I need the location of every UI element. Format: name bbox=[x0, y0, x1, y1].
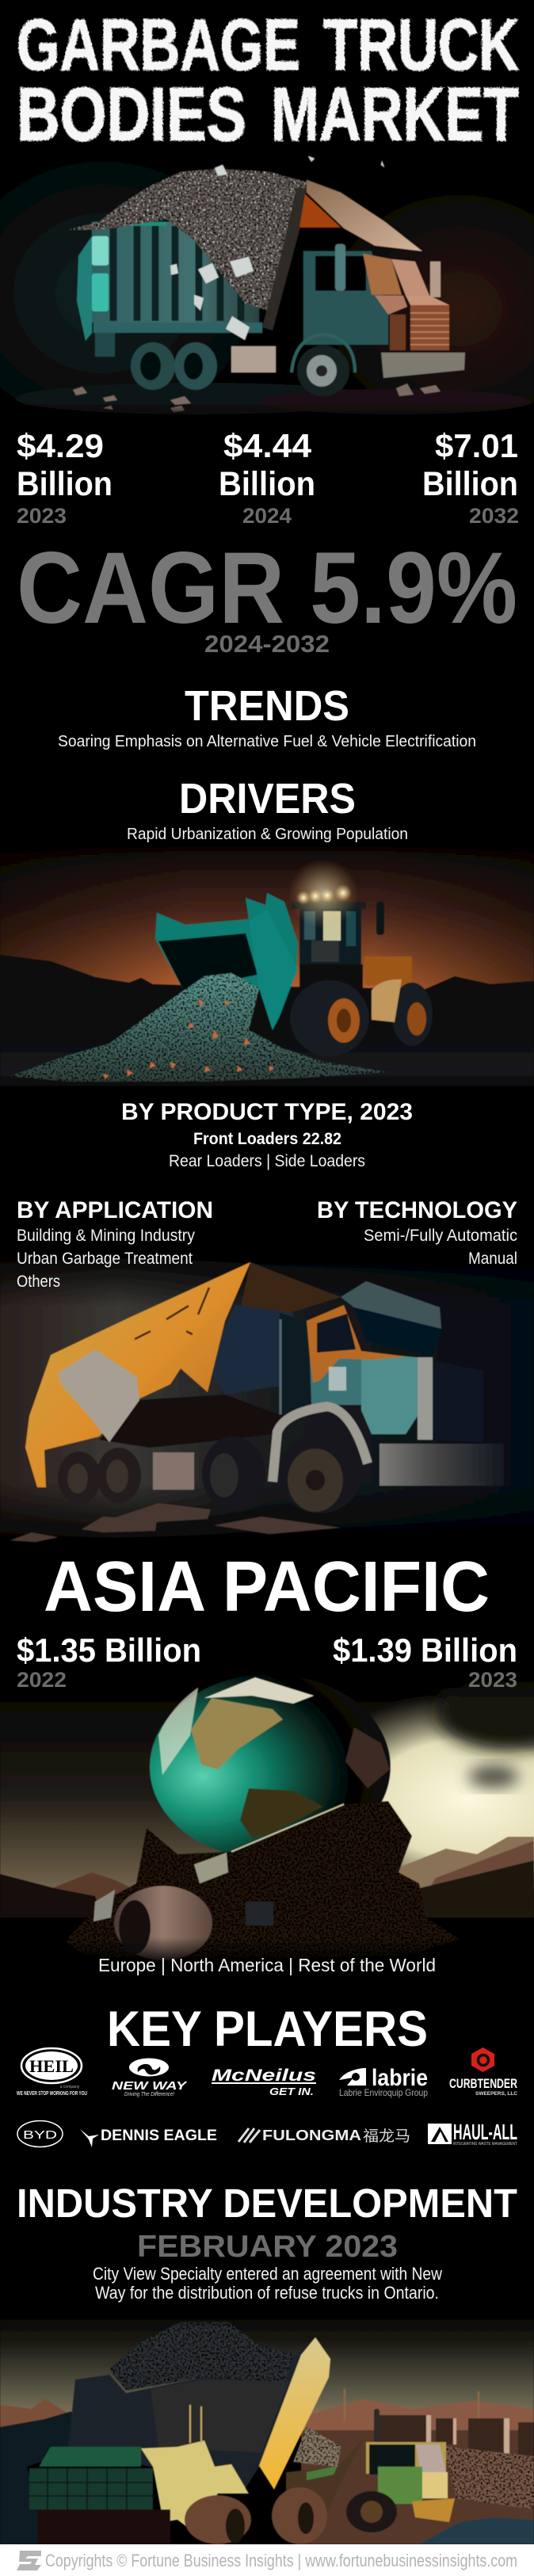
stat: 2024 market size: 2024 bbox=[242, 504, 292, 528]
stat: Asia Pacific 2023 bbox=[333, 1631, 517, 1692]
stat: Asia Pacific 2023: 2023 bbox=[468, 1668, 517, 1692]
logo: Heil: WE NEVER STOP WORKING FOR YOU bbox=[17, 2091, 87, 2097]
tailgate bbox=[262, 188, 307, 330]
segment: by application bbox=[17, 1197, 213, 1291]
loader headlights bbox=[288, 859, 358, 929]
heading: BY PRODUCT TYPE, 2023 bbox=[121, 1099, 413, 1125]
segment: by technology: Manual bbox=[468, 1250, 517, 1268]
illustration: garbage truck with overflowing load bbox=[0, 151, 534, 428]
container bbox=[77, 222, 262, 357]
logo: Labrie: labrie bbox=[372, 2065, 428, 2091]
heap of rubbish bbox=[65, 1801, 460, 1963]
heading: trends: TRENDS bbox=[185, 682, 349, 730]
tipping gate bbox=[259, 2337, 330, 2490]
truck bin bbox=[29, 2405, 249, 2544]
logo: Fulongma: FULONGMA bbox=[262, 2128, 361, 2143]
logo: BYD: BYD bbox=[23, 2128, 57, 2142]
site buildings bbox=[345, 2389, 534, 2456]
tipper body bbox=[68, 2345, 307, 2488]
items: Building & Mining Industry bbox=[17, 1227, 195, 1245]
illustration: globe on waste heap bbox=[0, 1672, 534, 1965]
heading: drivers: DRIVERS bbox=[179, 775, 356, 822]
drivers text: Rapid Urbanization & Growing Population bbox=[127, 826, 408, 843]
overflowing rubbish bbox=[68, 156, 384, 340]
stat: 2023 market size: 2023 bbox=[17, 504, 67, 528]
logo: Heil: a company bbox=[60, 2085, 80, 2089]
segment: by application: Others bbox=[17, 1273, 60, 1291]
garbage body bbox=[25, 1262, 341, 1487]
title: BODIES bbox=[17, 72, 246, 157]
logo: McNeilus bbox=[212, 2067, 316, 2097]
logo: Fulongma bbox=[238, 2128, 410, 2145]
stat: 2032 market size: Billion bbox=[422, 465, 518, 503]
logo: New Way bbox=[112, 2059, 189, 2097]
stat: Asia Pacific 2022: $1.35 Billion bbox=[17, 1631, 201, 1669]
logo: Curbtender bbox=[449, 2047, 517, 2097]
illustration: front loader dumping waste bbox=[0, 841, 534, 1098]
logo: BYD bbox=[17, 2120, 63, 2147]
logo: Heil: HEIL bbox=[29, 2056, 74, 2076]
segment: by application: Urban Garbage Treatment bbox=[17, 1250, 193, 1268]
region heading: Asia Pacific: ASIA PACIFIC bbox=[44, 1548, 490, 1627]
development text: City View Specialty entered an agreement with New bbox=[93, 2264, 442, 2284]
stat: 2032 market size: 2032 bbox=[469, 504, 519, 528]
truck wheels bbox=[131, 334, 355, 396]
stat: 2024 market size: Billion bbox=[219, 465, 315, 503]
barrel bbox=[114, 1886, 212, 1960]
logo: Labrie: Labrie Enviroquip Group bbox=[339, 2087, 428, 2098]
globe bbox=[150, 1674, 391, 1860]
loader cab bbox=[292, 902, 412, 988]
heading: BY TECHNOLOGY bbox=[317, 1197, 517, 1223]
logo: Curbtender: SWEEPERS, LLC bbox=[475, 2091, 517, 2097]
loader wheels bbox=[290, 979, 433, 1056]
logo: Haul-All bbox=[428, 2120, 518, 2147]
trends text: Soaring Emphasis on Alternative Fuel & Vehicle Electrification bbox=[58, 733, 476, 750]
stat: Asia Pacific 2023: $1.39 Billion bbox=[333, 1631, 517, 1669]
logo: New Way: NEW WAY bbox=[112, 2079, 189, 2093]
date: FEBRUARY 2023 bbox=[137, 2230, 398, 2264]
logo: Dennis Eagle: DENNIS EAGLE bbox=[101, 2128, 217, 2144]
icon: Fortune Business Insights logo bbox=[17, 2551, 41, 2570]
road debris bbox=[10, 1503, 341, 1542]
development text bbox=[93, 2264, 442, 2303]
logo: McNeilus: McNeilus bbox=[212, 2067, 316, 2085]
other segments: Rear Loaders | Side Loaders bbox=[169, 1152, 365, 1170]
cab roof bbox=[299, 180, 422, 251]
title bbox=[17, 5, 519, 157]
heading: industry development: INDUSTRY DEVELOPMENT bbox=[17, 2181, 517, 2226]
logo: Haul-All: INTEGRATING WASTE MANAGEMENT bbox=[453, 2142, 518, 2147]
truck cab bbox=[366, 2409, 455, 2522]
logo: New Way: Driving The Difference! bbox=[124, 2092, 174, 2097]
load of rocks bbox=[109, 2322, 293, 2391]
logo: Fulongma: 福龙马 bbox=[363, 2128, 410, 2145]
stat: 2032 market size bbox=[422, 427, 519, 528]
logo: McNeilus: GET IN. bbox=[269, 2086, 314, 2097]
CAGR period: 2024-2032 bbox=[204, 630, 330, 658]
truck cab bbox=[280, 1281, 504, 1486]
stat: Asia Pacific 2022 bbox=[17, 1631, 201, 1692]
development text: Way for the distribution of refuse trucks in Ontario. bbox=[95, 2283, 439, 2303]
leading segment: Front Loaders 22.82 bbox=[193, 1130, 341, 1148]
heading: key players: KEY PLAYERS bbox=[107, 2002, 428, 2057]
logo: Labrie bbox=[339, 2065, 428, 2098]
segment: by product type bbox=[121, 1099, 413, 1170]
stat: 2024 market size bbox=[219, 427, 315, 528]
waste pile bbox=[10, 973, 388, 1082]
truck wheels bbox=[58, 1406, 368, 1513]
right rubble bbox=[443, 2446, 534, 2509]
left rocks bbox=[0, 2411, 82, 2544]
title: GARBAGE bbox=[17, 5, 300, 86]
footer bar bbox=[0, 2544, 534, 2576]
truck cab bbox=[231, 244, 465, 378]
logo: Dennis Eagle bbox=[80, 2128, 217, 2147]
other regions: Europe | North America | Rest of the World bbox=[98, 1955, 436, 1975]
stat: 2024 market size: $4.44 bbox=[223, 427, 312, 464]
loader bucket bbox=[155, 893, 298, 1030]
truck wheels bbox=[185, 2487, 397, 2544]
stat: Asia Pacific 2022: 2022 bbox=[17, 1668, 67, 1692]
stat: 2023 market size bbox=[17, 427, 113, 528]
stat: 2023 market size: $4.29 bbox=[17, 427, 104, 464]
stat: 2023 market size: Billion bbox=[17, 465, 113, 503]
illustration: rusty orange and teal garbage truck bbox=[0, 1252, 534, 1551]
illustration: yellow dump truck at waste site bbox=[0, 2304, 534, 2544]
heading: BY APPLICATION bbox=[17, 1197, 213, 1223]
logo: Heil bbox=[17, 2048, 87, 2097]
items: Semi-/Fully Automatic bbox=[364, 1227, 517, 1245]
stat: 2032 market size: $7.01 bbox=[435, 427, 518, 464]
segment: by technology bbox=[317, 1197, 517, 1268]
